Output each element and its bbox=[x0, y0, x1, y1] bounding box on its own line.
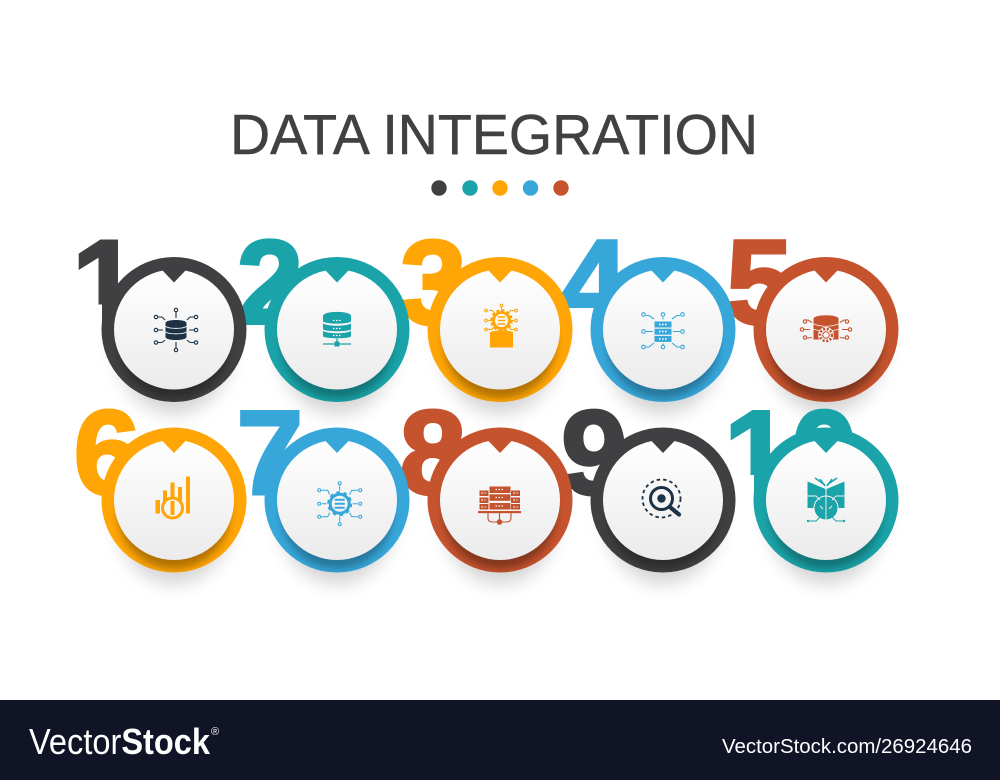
item 10 bbox=[730, 408, 898, 572]
number 2: 2 bbox=[236, 216, 303, 350]
icon: server network bbox=[642, 313, 684, 349]
title: DATA INTEGRATION bbox=[230, 103, 758, 167]
footer logo: VectorStock bbox=[29, 721, 211, 762]
icon: database server bbox=[323, 312, 351, 346]
footer bar bbox=[0, 700, 1000, 780]
item 6 bbox=[76, 408, 246, 572]
number 7: 7 bbox=[236, 386, 303, 520]
item 4 bbox=[562, 239, 736, 402]
number 9: 9 bbox=[561, 386, 628, 520]
icon: bar chart magnifier bbox=[156, 476, 190, 519]
item 8 bbox=[402, 408, 572, 572]
number 3: 3 bbox=[400, 216, 467, 350]
number 8: 8 bbox=[400, 386, 466, 520]
icon: server racks bbox=[478, 486, 521, 525]
icon: book and brain bbox=[807, 478, 845, 522]
item 2 bbox=[240, 238, 410, 402]
number 5: 5 bbox=[726, 216, 793, 350]
item 7 bbox=[240, 410, 410, 572]
number 1: 1 bbox=[72, 216, 139, 350]
number 4: 4 bbox=[561, 216, 628, 350]
icon: magnifier bbox=[642, 480, 680, 518]
number 6: 6 bbox=[74, 386, 140, 520]
item 3 bbox=[402, 238, 572, 402]
item 1 bbox=[78, 240, 246, 402]
footer image id: VectorStock.com/26924646 bbox=[722, 736, 972, 758]
title colour dots bbox=[431, 180, 569, 196]
icon: gear and user bbox=[485, 304, 517, 348]
icon: gear network bbox=[318, 482, 362, 526]
item 5 bbox=[730, 239, 898, 402]
number 10: 10 bbox=[724, 386, 857, 520]
icon: database network bbox=[154, 308, 198, 352]
icon: database gear bbox=[800, 315, 852, 343]
item 9 bbox=[564, 408, 736, 572]
registered mark: ® bbox=[211, 726, 219, 738]
